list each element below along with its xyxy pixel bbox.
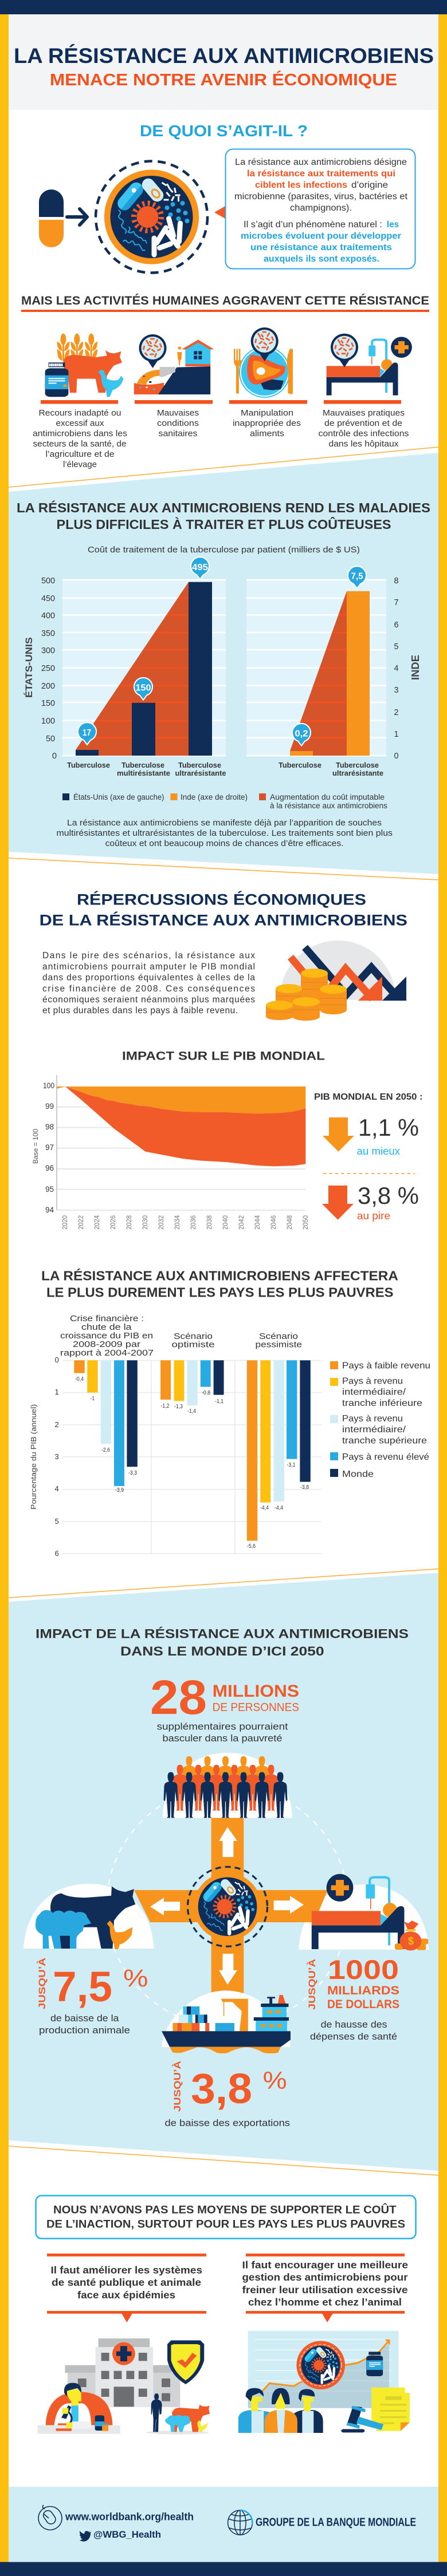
heading: maladies plus difficiles bbox=[17, 500, 430, 532]
stat: dépenses de santé: JUSQU’À bbox=[307, 1959, 317, 2010]
separator bars for the four causes bbox=[41, 400, 401, 404]
heading: répercussions économiques: DE LA RÉSISTANCE AUX ANTIMICROBIENS bbox=[40, 911, 407, 929]
icon: hospital bed bbox=[327, 337, 412, 396]
chart: tuberculosis cost USA bbox=[23, 557, 226, 777]
chart legend: income groups: Pays à faible revenu bbox=[342, 1361, 430, 1371]
footer text: twitter handle: @WBG_Health bbox=[93, 2529, 161, 2540]
chart: tuberculosis cost USA: 350 bbox=[41, 629, 55, 638]
chart legend: Augmentation du coût imputable bbox=[270, 792, 385, 801]
text block: systèmes de santé: Il faut améliorer les systèmes bbox=[50, 2265, 202, 2276]
chart: global GDP area: 98 bbox=[45, 1122, 54, 1131]
callout: definition: la résistance aux traitements qui bbox=[247, 169, 395, 179]
title line 1: LA RÉSISTANCE AUX ANTIMICROBIENS bbox=[14, 44, 434, 68]
chart: tuberculosis cost USA: Tuberculose bbox=[67, 761, 110, 769]
chart: tuberculosis cost USA: Tuberculose bbox=[121, 761, 164, 769]
icon: crowd bbox=[164, 1756, 288, 1818]
chart: global GDP area: 2040 bbox=[221, 1215, 229, 1230]
icon: twitter bird bbox=[80, 2531, 92, 2542]
icon: bacteria pin hospital bbox=[331, 334, 358, 368]
arrow: capsule to microbes bbox=[67, 209, 87, 225]
chart: tuberculosis cost India: 6 bbox=[394, 620, 399, 630]
chart: tuberculosis cost USA: ÉTATS-UNIS bbox=[23, 637, 34, 698]
stat: production animale: de baisse de la bbox=[50, 2013, 119, 2024]
chart: GDP loss by income group: chute de la bbox=[81, 1323, 132, 1332]
chart subtitle: Coût de traitement de la tuberculose par patient (milliers de $ US) bbox=[88, 546, 360, 555]
callout: definition: microbienne (parasites, virus, bactéries et bbox=[234, 192, 408, 202]
stat: exportations bbox=[165, 2061, 290, 2128]
chart: global GDP area: 2050 bbox=[301, 1215, 309, 1230]
icon: cargo ship bbox=[162, 1990, 291, 2053]
heading: activités humaines: MAIS LES ACTIVITÉS HUMAINES AGGRAVENT CETTE RÉSISTANCE bbox=[21, 294, 429, 307]
text: cause 1 bbox=[33, 409, 127, 469]
chart: global GDP area: 2036 bbox=[189, 1215, 197, 1230]
chart: GDP loss by income group: -5,6 bbox=[247, 1543, 256, 1550]
text block: gestion des antimicrobiens: freiner leur utilisation excessive bbox=[242, 2284, 408, 2296]
chart: tuberculosis cost India: 7 bbox=[394, 598, 399, 607]
heading: pays les plus pauvres: LE PLUS DUREMENT LES PAYS LES PLUS PAUVRES bbox=[46, 1285, 393, 1300]
chart: tuberculosis cost USA: 495 bbox=[192, 563, 208, 572]
stat: dépenses de santé: MILLIARDS bbox=[327, 1984, 399, 1997]
chart: global GDP area: 2034 bbox=[173, 1215, 181, 1230]
chart legend: income groups: tranche supérieure bbox=[342, 1436, 427, 1446]
callout: cost of inaction: DE L’INACTION, SURTOUT POUR LES PAYS LES PLUS PAUVRES bbox=[46, 2219, 405, 2231]
chart: tuberculosis cost USA: 50 bbox=[46, 734, 55, 744]
icon: livestock bbox=[36, 1886, 135, 1949]
callout: definition: d’origine bbox=[351, 180, 388, 190]
chart: global GDP area: 2046 bbox=[269, 1215, 277, 1230]
callout: cost of inaction bbox=[36, 2196, 416, 2238]
chart: tuberculosis cost India: ultrarésistante bbox=[332, 769, 383, 777]
text: tuberculosis explanation: multirésistantes et ultrarésistantes de la tuberculose. Les traitements sont bien plus bbox=[56, 828, 393, 838]
chart: tuberculosis cost USA: 500 bbox=[41, 576, 55, 586]
chart: GDP loss by income group: 6 bbox=[55, 1549, 59, 1558]
stat: 28 millions: MILLIONS bbox=[213, 1682, 299, 1701]
heading: impact dans le monde: DANS LE MONDE D’ICI 2050 bbox=[120, 1644, 324, 1658]
chart: GDP loss by income group: -2,6 bbox=[101, 1447, 110, 1453]
icon: coins and falling arrows bbox=[266, 941, 406, 1021]
footer panel bbox=[9, 2487, 438, 2562]
stat: dépenses de santé: 1000 bbox=[328, 1954, 399, 1985]
chart legend: income groups: Pays à revenu bbox=[342, 1377, 403, 1386]
chart: GDP loss by income group: -3,1 bbox=[287, 1461, 296, 1468]
callout: definition: La résistance aux antimicrobiens désigne bbox=[235, 157, 407, 167]
left border bbox=[0, 0, 9, 2576]
chart: global GDP area: 2026 bbox=[109, 1215, 117, 1230]
text: worst case paragraph: Dans le pire des scénarios, la résistance aux bbox=[42, 951, 255, 961]
heading: maladies plus difficiles: PLUS DIFFICILES À TRAITER ET PLUS COÛTEUSES bbox=[56, 516, 391, 532]
chart: GDP loss by income group: -1,4 bbox=[187, 1408, 196, 1415]
text: cause 3: Manipulation bbox=[241, 409, 293, 418]
chart: tuberculosis cost USA: multirésistante bbox=[117, 769, 170, 777]
chart: tuberculosis cost USA: 400 bbox=[41, 611, 55, 621]
chart: tuberculosis cost USA: 250 bbox=[41, 663, 55, 673]
text: cause 4: contrôle des infections bbox=[319, 429, 409, 438]
dome: livestock bbox=[23, 1884, 154, 1949]
chart: tuberculosis cost India: INDE bbox=[410, 655, 421, 680]
text: worst case paragraph: économiques seraient néanmoins plus marquées bbox=[42, 995, 255, 1005]
text: cause 1: antimicrobiens dans les bbox=[33, 429, 127, 438]
text block: gestion des antimicrobiens: Il faut encourager une meilleure bbox=[242, 2259, 408, 2271]
text block: systèmes de santé bbox=[47, 2254, 206, 2322]
stat: 28 millions: supplémentaires pourraient bbox=[157, 1722, 288, 1732]
chart: global GDP area: 99 bbox=[45, 1101, 54, 1111]
text: cause 4: dans les hôpitaux bbox=[329, 440, 399, 449]
chart: global GDP area: 2024 bbox=[93, 1215, 101, 1230]
icon: mouse cursor bbox=[38, 2505, 62, 2530]
chart: GDP loss by income group: Scénario bbox=[259, 1332, 298, 1341]
icon: microbes circle bbox=[96, 161, 207, 272]
text: tuberculosis explanation: La résistance aux antimicrobiens se manifeste déjà par l’apparition de souches bbox=[67, 818, 382, 828]
stat: production animale: 7,5 bbox=[53, 1963, 112, 2010]
chart: GDP loss by income group bbox=[29, 1314, 321, 1558]
chart legend: income groups: Pays à revenu bbox=[342, 1414, 403, 1424]
callout: definition: champignons). bbox=[290, 203, 352, 213]
stat: exportations: % bbox=[263, 2067, 287, 2095]
chart: GDP loss by income group: -3,3 bbox=[128, 1469, 137, 1476]
dome: health bbox=[299, 1884, 429, 1950]
text: worst case paragraph: antimicrobiens pourrait amputer le PIB mondial bbox=[42, 962, 255, 972]
text: cause 2: conditions bbox=[157, 419, 199, 428]
stat: production animale: % bbox=[123, 1965, 148, 1993]
chart: tuberculosis cost India: 5 bbox=[394, 642, 399, 651]
chart: global GDP area: 2048 bbox=[285, 1215, 293, 1230]
callout: definition: les bbox=[387, 220, 399, 230]
illustration: hospital, scientist and shield bbox=[38, 2338, 210, 2435]
chart: tuberculosis cost India: 4 bbox=[394, 663, 399, 673]
chart: tuberculosis cost India: Tuberculose bbox=[336, 761, 379, 769]
illustration: policy makers and chart bbox=[238, 2331, 410, 2433]
heading: maladies plus difficiles: LA RÉSISTANCE AUX ANTIMICROBIENS REND LES MALADIES bbox=[17, 500, 430, 515]
chart: GDP loss by income group: 5 bbox=[55, 1517, 59, 1526]
icon: sanitation bbox=[134, 339, 214, 394]
callout: definition bbox=[214, 149, 415, 269]
chart: GDP loss by income group: -1,1 bbox=[215, 1398, 223, 1405]
chart: GDP loss by income group: 2008-2009 par bbox=[73, 1340, 140, 1349]
dome: people bbox=[163, 1753, 292, 1818]
top navy band bbox=[0, 0, 447, 14]
chart: GDP loss by income group: 0 bbox=[55, 1356, 59, 1364]
chart: tuberculosis cost USA: 100 bbox=[41, 716, 55, 726]
stat: exportations: de baisse des exportations bbox=[165, 2118, 290, 2128]
icon: hospital bed with money bbox=[312, 1874, 428, 1950]
stat: dépenses de santé: dépenses de santé bbox=[310, 2032, 397, 2042]
chart: global GDP area: 2028 bbox=[125, 1215, 133, 1230]
stat: dépenses de santé bbox=[307, 1954, 399, 2042]
chart: GDP loss by income group: -0,8 bbox=[202, 1389, 210, 1396]
stat: production animale: JUSQU’À bbox=[37, 1958, 48, 2009]
chart: GDP loss by income group: -1,3 bbox=[174, 1403, 183, 1410]
text: cause 4 bbox=[319, 409, 409, 449]
text: cause 1: l’élevage bbox=[63, 460, 97, 469]
chart: tuberculosis cost India: 7,5 bbox=[351, 571, 363, 582]
chart: tuberculosis cost USA: ultrarésistante bbox=[175, 769, 226, 777]
chart: tuberculosis cost USA: 300 bbox=[41, 646, 55, 655]
chart: tuberculosis cost USA: 0 bbox=[52, 751, 57, 761]
chart: global GDP area: 100 bbox=[43, 1081, 54, 1090]
chart: GDP loss by income group: -0,4 bbox=[75, 1376, 84, 1382]
chart legend: income groups: tranche inférieure bbox=[342, 1398, 422, 1408]
text: cause 1: secteurs de la santé, de bbox=[33, 440, 126, 449]
chart legend: income groups: intermédiaire/ bbox=[342, 1425, 406, 1435]
heading: impact dans le monde bbox=[36, 1627, 409, 1658]
chart: GDP loss by income group: Pourcentage du PIB (annuel) bbox=[29, 1404, 38, 1510]
chart: GDP loss by income group: 1 bbox=[55, 1388, 59, 1396]
text: cause 1: l’agriculture et de bbox=[46, 450, 115, 459]
text: cause 2: sanitaires bbox=[158, 429, 197, 438]
text: cause 2: Mauvaises bbox=[157, 409, 199, 418]
chart legend: income groups: Pays à revenu élevé bbox=[342, 1452, 429, 1462]
heading: de quoi s'agit-il: DE QUOI S’AGIT-IL ? bbox=[140, 122, 308, 140]
icon: bacteria pin sanitation bbox=[139, 334, 166, 368]
stat: 28 millions: basculer dans la pauvreté bbox=[163, 1733, 282, 1744]
chart: GDP loss by income group: optimiste bbox=[172, 1341, 214, 1350]
icon: bacteria pin food bbox=[251, 327, 279, 361]
callout: GDP in 2050: PIB MONDIAL EN 2050 : bbox=[314, 1092, 423, 1102]
chart: GDP loss by income group: -3,9 bbox=[115, 1487, 124, 1494]
chart: tuberculosis cost India: 3 bbox=[394, 685, 399, 695]
icon: capsule bbox=[39, 189, 64, 247]
chart: global GDP area: 2038 bbox=[205, 1215, 213, 1230]
text: cause 2 bbox=[157, 409, 199, 438]
chart: global GDP area: 2042 bbox=[237, 1215, 245, 1230]
heading: pays les plus pauvres bbox=[41, 1268, 398, 1300]
chart legend: income groups: intermédiaire/ bbox=[342, 1388, 406, 1397]
dashed ring bbox=[107, 1785, 348, 2027]
chart: global GDP area: Base = 100 bbox=[32, 1129, 40, 1164]
text: worst case paragraph bbox=[42, 951, 255, 1016]
text: cause 1: Recours inadapté ou bbox=[39, 409, 121, 418]
chart: GDP loss by income group: Scénario bbox=[174, 1332, 213, 1341]
panel: tuberculosis cost background bbox=[9, 453, 438, 874]
text: worst case paragraph: et plus durables dans les pays à faible revenu. bbox=[42, 1006, 238, 1016]
chart legend: Inde (axe de droite) bbox=[181, 792, 248, 801]
stat: dépenses de santé: DE DOLLARS bbox=[327, 1998, 399, 2011]
callout: GDP in 2050 bbox=[314, 1092, 423, 1222]
panel: worldwide impact background bbox=[9, 1573, 438, 2171]
text: cause 3: aliments bbox=[250, 429, 284, 438]
chart: GDP loss by income group: -1,2 bbox=[160, 1402, 170, 1409]
callout: definition: ciblent les infections bbox=[255, 180, 347, 190]
chart: global GDP area: 2032 bbox=[157, 1215, 165, 1230]
chart legend: à la résistance aux antimicrobiens bbox=[270, 801, 387, 810]
footer text: website: www.worldbank.org/health bbox=[65, 2511, 194, 2523]
chart: tuberculosis cost USA: 450 bbox=[41, 594, 55, 603]
chart: global GDP area bbox=[32, 1075, 309, 1230]
chart: GDP loss by income group: 3 bbox=[55, 1452, 59, 1461]
text: worst case paragraph: dans des proportions équivalentes à celles de la bbox=[42, 973, 255, 983]
chart: global GDP area: 2022 bbox=[77, 1215, 85, 1230]
chart: tuberculosis cost India: 2 bbox=[394, 708, 399, 717]
chart: global GDP area: 95 bbox=[45, 1184, 54, 1194]
chart: global GDP area: 2020 bbox=[61, 1215, 69, 1230]
chart: GDP loss by income group: 2 bbox=[55, 1420, 59, 1429]
text: cause 4: de prévention et de bbox=[324, 419, 402, 428]
callout: definition: microbes évoluent pour développer bbox=[241, 231, 401, 241]
text: cause 3 bbox=[233, 409, 301, 438]
chart: GDP loss by income group: -4,4 bbox=[275, 1504, 283, 1511]
chart: global GDP area: 2044 bbox=[253, 1215, 261, 1230]
text: cause 3: inappropriée des bbox=[233, 419, 301, 428]
text: tuberculosis explanation bbox=[56, 818, 393, 848]
text block: gestion des antimicrobiens: gestion des antimicrobiens pour bbox=[242, 2271, 408, 2283]
chart: tuberculosis cost India: Tuberculose bbox=[279, 761, 321, 769]
stat: dépenses de santé: de hausse des bbox=[321, 2020, 387, 2030]
heading: répercussions économiques: RÉPERCUSSIONS ÉCONOMIQUES bbox=[77, 891, 366, 908]
chart legend: income groups: Monde bbox=[342, 1469, 374, 1479]
text block: gestion des antimicrobiens bbox=[242, 2254, 408, 2322]
icon: food handling bbox=[234, 346, 293, 398]
chart legend bbox=[62, 792, 387, 810]
callout: definition: Il s’agit d’un phénomène naturel : bbox=[244, 220, 382, 230]
chart legend: États-Unis (axe de gauche) bbox=[73, 792, 164, 801]
chart: tuberculosis cost USA: 150 bbox=[41, 698, 55, 708]
chart: GDP loss by income group: rapport à 2004-2007 bbox=[60, 1349, 154, 1358]
stat: production animale: production animale bbox=[39, 2025, 130, 2036]
chart: GDP loss by income group: -1 bbox=[91, 1395, 95, 1402]
stat: 28 millions bbox=[150, 1670, 299, 1744]
chart: GDP loss by income group: Crise financière : bbox=[70, 1314, 144, 1323]
chart: tuberculosis cost India: 1 bbox=[394, 729, 399, 739]
callout: GDP in 2050: 3,8 % bbox=[358, 1182, 419, 1209]
text: tuberculosis explanation: coûteux et ont beaucoup moins de chances d’être efficaces. bbox=[105, 839, 344, 848]
chart: tuberculosis cost India: 8 bbox=[394, 576, 399, 586]
heading: impact sur le PIB: IMPACT SUR LE PIB MONDIAL bbox=[122, 1050, 325, 1063]
right border bbox=[438, 0, 447, 2576]
chart: GDP loss by income group: -3,8 bbox=[300, 1484, 309, 1491]
heading: répercussions économiques bbox=[40, 891, 407, 929]
callout: definition: une résistance aux traitements bbox=[250, 243, 392, 252]
chart: GDP loss by income group: pessimiste bbox=[256, 1341, 302, 1350]
stat: exportations: JUSQU’À bbox=[172, 2061, 183, 2112]
chart: global GDP area: 96 bbox=[45, 1163, 54, 1172]
chart: GDP loss by income group: -4,4 bbox=[260, 1504, 269, 1511]
stat: production animale bbox=[37, 1958, 148, 2036]
text block: systèmes de santé: de santé publique et animale bbox=[52, 2277, 201, 2288]
title panel bbox=[9, 14, 438, 110]
chart: tuberculosis cost USA: 200 bbox=[41, 681, 55, 691]
chart: global GDP area: 97 bbox=[45, 1143, 54, 1152]
chart: GDP loss by income group: croissance du PIB en bbox=[60, 1332, 153, 1341]
text: cause 1: excessif aux bbox=[56, 419, 104, 428]
logo: globe bbox=[228, 2510, 252, 2535]
title line 2: MENACE NOTRE AVENIR ÉCONOMIQUE bbox=[50, 70, 397, 89]
callout: GDP in 2050: au pire bbox=[357, 1210, 390, 1222]
chart: tuberculosis cost India: 0,2 bbox=[295, 729, 308, 738]
diagram: central cross bbox=[134, 1818, 328, 1996]
callout: definition: auxquels ils sont exposés. bbox=[264, 254, 379, 264]
stat: 28 millions: DE PERSONNES bbox=[213, 1701, 299, 1714]
heading: pays les plus pauvres: LA RÉSISTANCE AUX ANTIMICROBIENS AFFECTERA bbox=[41, 1268, 398, 1283]
bottom navy band bbox=[0, 2562, 447, 2576]
text: cause 4: Mauvaises pratiques bbox=[323, 409, 405, 418]
stat: exportations: 3,8 bbox=[191, 2065, 252, 2112]
text: worst case paragraph: crise financière de 2008. Ces conséquences bbox=[42, 984, 255, 994]
chart: tuberculosis cost India bbox=[246, 566, 421, 777]
chart: global GDP area: 2030 bbox=[141, 1215, 149, 1230]
chart legend: income groups bbox=[330, 1361, 430, 1479]
stat: 28 millions: 28 bbox=[150, 1670, 207, 1724]
chart: tuberculosis cost USA: 17 bbox=[83, 728, 91, 738]
callout: GDP in 2050: 1,1 % bbox=[358, 1114, 419, 1141]
heading: impact dans le monde: IMPACT DE LA RÉSISTANCE AUX ANTIMICROBIENS bbox=[36, 1627, 409, 1641]
text block: systèmes de santé: face aux épidémies bbox=[77, 2289, 175, 2301]
callout: GDP in 2050: au mieux bbox=[356, 1145, 400, 1157]
callout: cost of inaction: NOUS N’AVONS PAS LES MOYENS DE SUPPORTER LE COÛT bbox=[53, 2204, 397, 2217]
icon: dollar sign: $ bbox=[408, 1935, 414, 1947]
chart: global GDP area: 94 bbox=[45, 1205, 54, 1214]
icon: farming wheat cow bottle bbox=[45, 334, 123, 397]
chart: GDP loss by income group: 4 bbox=[55, 1484, 59, 1493]
chart: tuberculosis cost USA: Tuberculose bbox=[178, 761, 221, 769]
text block: gestion des antimicrobiens: chez l’homme et chez l’animal bbox=[248, 2297, 402, 2308]
chart: tuberculosis cost USA: 150 bbox=[135, 683, 151, 693]
chart: tuberculosis cost India: 0 bbox=[394, 751, 399, 761]
